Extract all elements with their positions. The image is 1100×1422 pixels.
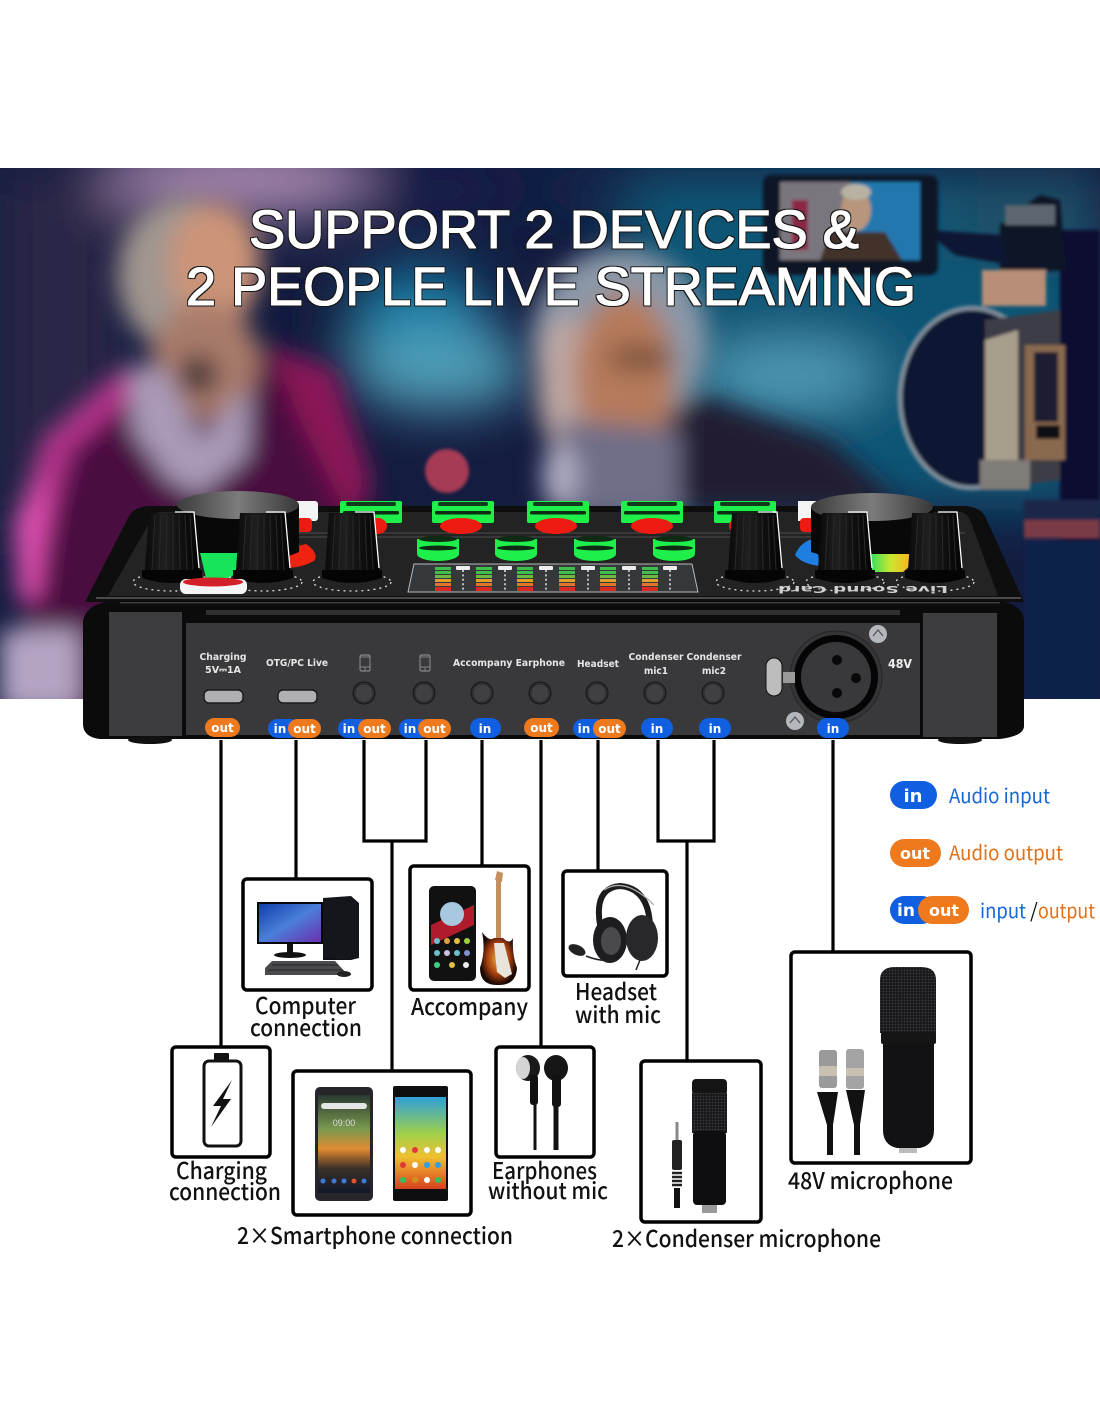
in/out port tags: in	[827, 722, 839, 736]
box: headset with mic	[563, 871, 667, 1030]
legend: input / output: /	[1030, 895, 1038, 924]
left volume ring lights	[288, 501, 318, 568]
legend: audio input: Audio input	[949, 780, 1050, 809]
label: earphones without mic: Earphones	[492, 1152, 597, 1186]
left master knob	[133, 491, 391, 591]
XLR input	[766, 625, 887, 730]
power button	[180, 578, 247, 594]
device port labels: Accompany Earphone	[453, 658, 565, 669]
label: computer connection	[250, 987, 362, 1043]
box: earphones without mic	[488, 1047, 608, 1206]
camera lens and body	[1058, 228, 1100, 540]
box: 48V microphone	[788, 952, 971, 1196]
right master knob	[716, 493, 974, 591]
icon: desktop computer	[257, 896, 359, 977]
box: smartphone connection	[237, 1071, 513, 1251]
left side block	[109, 612, 182, 736]
title: 2 PEOPLE LIVE STREAMING	[186, 257, 916, 317]
device port labels: 48V	[888, 656, 912, 671]
label: charging connection	[169, 1152, 281, 1207]
icon: 48V condenser mic	[880, 967, 936, 1153]
audio jacks	[353, 682, 724, 704]
device port labels: Charging	[200, 652, 246, 663]
icon: phone with screen	[429, 886, 476, 981]
device port labels: Condenser	[628, 652, 684, 663]
legend: input / output	[890, 895, 1095, 924]
in/out port tags: out	[423, 722, 446, 736]
box: accompany	[410, 866, 529, 1022]
label: headset with mic: Headset	[575, 973, 657, 1007]
icon: smartphone one	[315, 1087, 373, 1201]
device port labels: mic2	[702, 666, 726, 677]
label: 2x smartphone connection: 2×Smartphone connection	[237, 1217, 513, 1251]
red bokeh	[425, 449, 469, 493]
icon: headset	[567, 885, 658, 970]
port panel	[186, 623, 920, 735]
legend: audio output: out	[900, 844, 930, 863]
legend: input / output: in	[897, 901, 915, 921]
box: charging connection	[169, 1047, 281, 1207]
label: accompany: Accompany	[411, 988, 528, 1022]
icon: battery	[204, 1053, 241, 1146]
device port labels: mic1	[644, 666, 668, 677]
legend: audio output: Audio output	[949, 837, 1063, 866]
background photo: blurred live streaming studio	[0, 140, 1100, 720]
head of left person	[101, 188, 208, 354]
in/out port tags: out	[363, 722, 386, 736]
in/out port tags: in	[578, 722, 590, 736]
camera monitor	[763, 175, 938, 275]
device port labels: 5V⎓1A	[205, 665, 241, 676]
level meter display	[408, 564, 698, 592]
right side block	[923, 613, 997, 737]
title: SUPPORT 2 DEVICES &	[249, 200, 859, 260]
label: earphones without mic: without mic	[488, 1172, 608, 1206]
label: computer connection: Computer	[255, 987, 357, 1021]
shirt of left person	[10, 345, 380, 720]
connection wires	[221, 740, 833, 1071]
label: 2x condenser microphone: 2×Condenser microphone	[612, 1220, 881, 1254]
icon: earphones	[516, 1055, 568, 1150]
box: condenser microphone	[612, 1061, 881, 1254]
in/out port tags: in	[343, 722, 355, 736]
in/out port tags: out	[530, 721, 553, 735]
legend: audio input: in	[904, 786, 922, 807]
right ring lights	[795, 501, 820, 566]
in/out port tags: in	[651, 722, 663, 736]
device port labels: OTG/PC Live	[266, 658, 328, 669]
label: headset with mic: with mic	[575, 996, 661, 1030]
USB ports	[204, 690, 317, 703]
box: computer connection	[243, 879, 372, 1043]
in/out port tags: in	[404, 722, 416, 736]
device top panel	[85, 506, 1024, 602]
device port labels	[200, 652, 912, 677]
center person	[540, 395, 905, 510]
legend: input / output: input	[980, 895, 1026, 924]
icon: smartphone one: 09:00	[333, 1118, 355, 1128]
label: earphones without mic	[488, 1152, 608, 1206]
in/out port tags	[205, 718, 849, 738]
icon: condenser mic	[692, 1079, 727, 1213]
in/out port tags: out	[211, 721, 234, 735]
icon: XLR cables	[817, 1049, 865, 1155]
label: charging connection: connection	[169, 1173, 281, 1207]
legend	[890, 780, 1095, 924]
device front body	[83, 601, 1024, 739]
green top buttons	[340, 501, 776, 561]
icon: smartphone two	[393, 1086, 448, 1201]
legend: input / output: output	[1038, 895, 1095, 924]
legend: input / output: out	[929, 901, 959, 920]
sound card device	[83, 491, 1024, 744]
in/out port tags: in	[709, 722, 721, 736]
legend: audio output	[890, 837, 1063, 867]
label: computer connection: connection	[250, 1009, 362, 1043]
device feet	[128, 736, 982, 744]
label: charging connection: Charging	[176, 1152, 267, 1186]
device port labels: Headset	[577, 659, 619, 670]
label: headset with mic	[575, 973, 661, 1030]
in/out port tags: in	[479, 722, 491, 736]
label: 48V microphone: 48V microphone	[788, 1162, 953, 1196]
upside-down brand label: Live Sound Card	[778, 583, 948, 594]
phone port icons	[360, 655, 430, 671]
in/out port tags: out	[598, 722, 621, 736]
icon: electric guitar	[480, 871, 517, 985]
title	[186, 200, 916, 317]
device port labels: Condenser	[686, 652, 742, 663]
in/out port tags: out	[293, 722, 316, 736]
icon: audio jack plug	[672, 1122, 682, 1208]
legend: audio input	[890, 780, 1050, 809]
in/out port tags: in	[274, 722, 286, 736]
